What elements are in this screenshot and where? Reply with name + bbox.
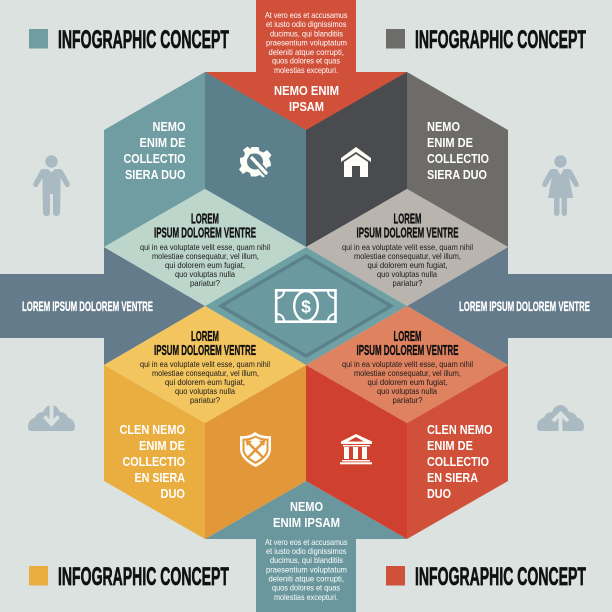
orange hexagon label: ENIM DE bbox=[139, 439, 185, 453]
grey hexagon label bbox=[427, 120, 489, 182]
pale green diamond heading: LOREM bbox=[191, 212, 219, 228]
top arrow body text: et iusto odio dignissimos bbox=[266, 19, 346, 29]
panel: red hexagon bottom right bbox=[306, 365, 508, 539]
bottom arrow body text: deleniti atque corrupti, bbox=[268, 574, 344, 584]
pale green diamond heading: IPSUM DOLOREM VENTRE bbox=[154, 226, 256, 242]
red hexagon label: COLLECTIO bbox=[427, 455, 489, 469]
panel: top red arrow bbox=[205, 0, 407, 131]
bottom arrow body text: At vero eos et accusamus bbox=[265, 537, 348, 547]
teal hexagon label: SIERA DUO bbox=[125, 168, 186, 182]
grey hexagon label: ENIM DE bbox=[427, 136, 473, 150]
stone diamond body text: qui dolorem eum fugiat, bbox=[368, 260, 448, 270]
bottom arrow heading bbox=[273, 500, 340, 530]
top arrow body text: ducimus, qui blanditiis bbox=[270, 28, 343, 38]
bottom arrow body text: molestias excepturi. bbox=[274, 592, 338, 602]
icon: man bbox=[33, 155, 70, 216]
orange hexagon label: EN SIERA bbox=[134, 471, 185, 485]
icon: shield with crossed arrows bbox=[240, 432, 271, 467]
title: bottom left with orange swatch bbox=[29, 563, 229, 591]
top arrow heading: IPSAM bbox=[289, 100, 324, 114]
orange hexagon label: COLLECTIO bbox=[122, 455, 185, 469]
stone diamond body text: qui in ea voluptate velit esse, quam nihil bbox=[342, 242, 473, 252]
teal hexagon label: ENIM DE bbox=[140, 136, 186, 150]
yellow diamond body text bbox=[140, 359, 270, 405]
bottom arrow body text: quos dolores et quas bbox=[272, 583, 340, 593]
pale green diamond body text: qui dolorem eum fugiat, bbox=[165, 260, 245, 270]
panel: orange hexagon bottom left bbox=[104, 365, 306, 539]
bottom arrow heading: ENIM IPSAM bbox=[273, 516, 340, 530]
icon: woman bbox=[542, 155, 579, 216]
salmon diamond heading: LOREM bbox=[394, 329, 422, 345]
bottom arrow body text: praesentium voluptatum bbox=[266, 564, 347, 574]
salmon diamond body text: quo voluptas nulla bbox=[377, 386, 437, 396]
title: bottom left with orange swatch: INFOGRAPHIC CONCEPT bbox=[58, 563, 229, 591]
yellow diamond body text: qui in ea voluptate velit esse, quam nihil bbox=[140, 359, 270, 369]
stone diamond body text: pariatur? bbox=[392, 278, 423, 288]
grey hexagon label: COLLECTIO bbox=[427, 152, 489, 166]
icon: house bbox=[341, 147, 371, 177]
stone diamond heading: IPSUM DOLOREM VENTRE bbox=[356, 226, 459, 242]
orange hexagon label bbox=[120, 423, 185, 501]
teal hexagon label bbox=[124, 120, 186, 182]
teal hexagon label: NEMO bbox=[152, 120, 186, 134]
top arrow heading bbox=[274, 84, 339, 114]
top arrow body text: molestias excepturi. bbox=[274, 65, 338, 75]
pale green diamond body text bbox=[140, 242, 270, 288]
salmon diamond body text: qui in ea voluptate velit esse, quam nihil bbox=[342, 359, 473, 369]
salmon diamond body text: pariatur? bbox=[392, 395, 423, 405]
icon: cloud download bbox=[28, 404, 75, 431]
salmon diamond heading: IPSUM DOLOREM VENTRE bbox=[356, 343, 459, 359]
panel: bottom teal arrow bbox=[205, 481, 407, 612]
stone diamond body text: molestiae consequatur, vel illum, bbox=[354, 251, 461, 261]
panel: stone diamond bbox=[306, 189, 508, 306]
yellow diamond body text: qui dolorem eum fugiat, bbox=[165, 377, 245, 387]
yellow diamond heading bbox=[154, 329, 256, 359]
title: top left with teal swatch bbox=[29, 26, 229, 54]
orange hexagon label: DUO bbox=[160, 487, 185, 501]
pale green diamond heading bbox=[154, 212, 256, 242]
pale green diamond body text: molestiae consequatur, vel illum, bbox=[152, 251, 259, 261]
grey hexagon label: SIERA DUO bbox=[427, 168, 487, 182]
salmon diamond body text: qui dolorem eum fugiat, bbox=[368, 377, 448, 387]
bottom arrow body text bbox=[265, 537, 348, 602]
icon: banknote bbox=[276, 290, 336, 322]
yellow diamond body text: quo voluptas nulla bbox=[175, 386, 235, 396]
icon: banknote: $ bbox=[301, 296, 311, 316]
red hexagon label: ENIM DE bbox=[427, 439, 473, 453]
grey hexagon label: NEMO bbox=[427, 120, 460, 134]
top arrow body text bbox=[265, 10, 348, 75]
yellow diamond body text: pariatur? bbox=[190, 395, 220, 405]
top arrow body text: deleniti atque corrupti, bbox=[268, 47, 344, 57]
bottom arrow body text: ducimus, qui blanditiis bbox=[270, 555, 343, 565]
stone diamond heading: LOREM bbox=[394, 212, 422, 228]
yellow diamond heading: LOREM bbox=[191, 329, 219, 345]
stone diamond body text: quo voluptas nulla bbox=[377, 269, 437, 279]
band label left: LOREM IPSUM DOLOREM VENTRE bbox=[22, 298, 153, 314]
panel: teal hexagon top left bbox=[104, 72, 306, 247]
orange hexagon label: CLEN NEMO bbox=[120, 423, 185, 437]
icon: cloud upload bbox=[537, 405, 584, 432]
top arrow body text: quos dolores et quas bbox=[272, 56, 340, 66]
stone diamond body text bbox=[342, 242, 473, 288]
pale green diamond body text: qui in ea voluptate velit esse, quam nihil bbox=[140, 242, 270, 252]
pale green diamond body text: quo voluptas nulla bbox=[175, 269, 235, 279]
panel: yellow diamond bbox=[104, 306, 306, 423]
red hexagon label: EN SIERA bbox=[427, 471, 478, 485]
bottom arrow body text: et iusto odio dignissimos bbox=[266, 546, 346, 556]
top arrow body text: praesentium voluptatum bbox=[266, 38, 347, 48]
salmon diamond body text: molestiae consequatur, vel illum, bbox=[354, 368, 461, 378]
yellow diamond body text: molestiae consequatur, vel illum, bbox=[152, 368, 259, 378]
title: top left with teal swatch: INFOGRAPHIC CONCEPT bbox=[58, 26, 229, 54]
panel: centre diamond bbox=[205, 247, 407, 365]
panel: grey hexagon top right bbox=[306, 72, 508, 247]
teal hexagon label: COLLECTIO bbox=[124, 152, 186, 166]
red hexagon label: DUO bbox=[427, 487, 451, 501]
top arrow body text: At vero eos et accusamus bbox=[265, 10, 348, 20]
pale green diamond body text: pariatur? bbox=[190, 278, 220, 288]
icon: gear and wrench bbox=[239, 146, 272, 178]
salmon diamond heading bbox=[356, 329, 459, 359]
panel: pale green diamond bbox=[104, 189, 306, 306]
panel: salmon diamond bbox=[306, 306, 508, 423]
red hexagon label: CLEN NEMO bbox=[427, 423, 493, 437]
bottom arrow heading: NEMO bbox=[290, 500, 323, 514]
icon: classical bank building bbox=[340, 434, 372, 464]
horizontal band bbox=[0, 247, 612, 365]
red hexagon label bbox=[427, 423, 493, 501]
yellow diamond heading: IPSUM DOLOREM VENTRE bbox=[154, 343, 256, 359]
top arrow heading: NEMO ENIM bbox=[274, 84, 339, 98]
stone diamond heading bbox=[356, 212, 459, 242]
salmon diamond body text bbox=[342, 359, 473, 405]
